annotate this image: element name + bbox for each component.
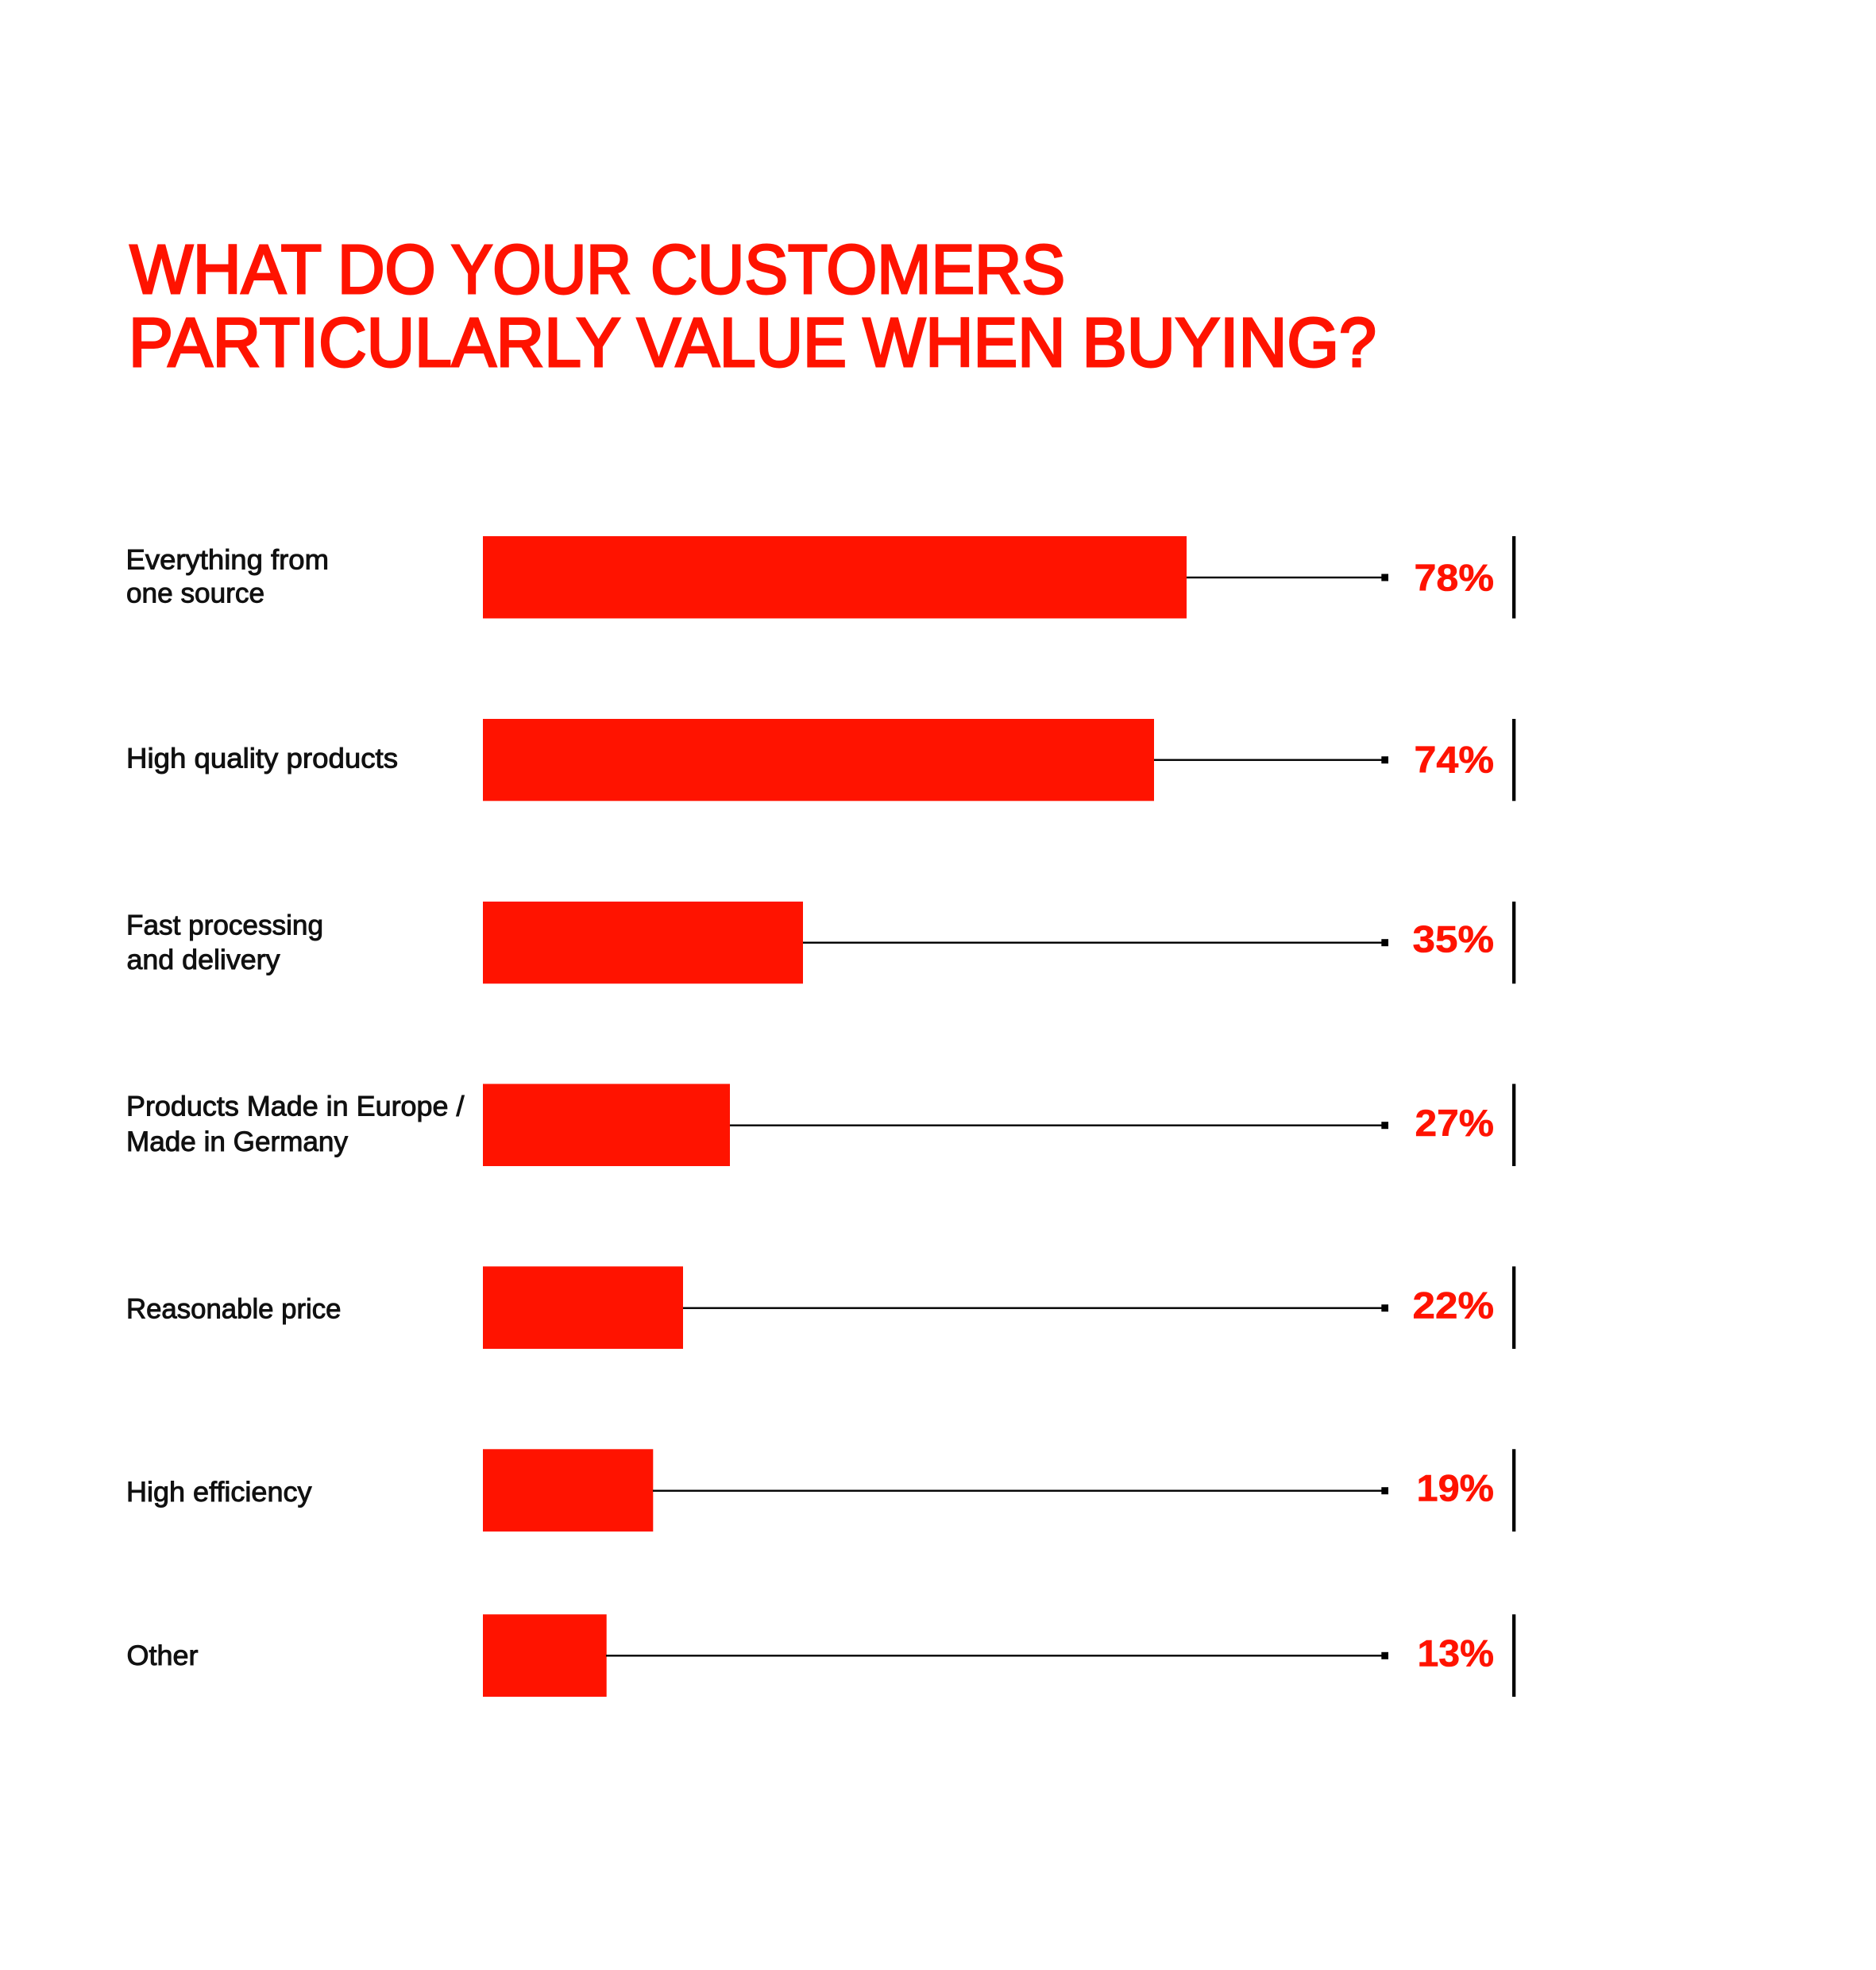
label (126, 1091, 465, 1157)
value: 27% (1415, 1103, 1494, 1145)
title: VALUE (637, 304, 847, 381)
leader line (1154, 756, 1388, 763)
value: 13% (1417, 1632, 1494, 1674)
end rule (1512, 719, 1515, 801)
label: Products Made in Europe / (126, 1091, 465, 1122)
title: WHAT (130, 231, 322, 308)
bar (483, 902, 803, 983)
end rule (1512, 536, 1515, 618)
title: WHEN (863, 304, 1066, 381)
row: products made in Europe / Germany (126, 1084, 1515, 1166)
leader line (730, 1122, 1388, 1129)
bar (483, 1266, 683, 1349)
row: reasonable price (126, 1266, 1515, 1349)
end rule (1512, 1614, 1515, 1697)
title: DO (338, 231, 435, 308)
label: one source (126, 578, 264, 608)
label: Other (127, 1640, 199, 1671)
bar (483, 1084, 730, 1166)
bar (483, 1614, 607, 1697)
label (125, 545, 329, 608)
label: and delivery (127, 944, 280, 975)
row: high efficiency (126, 1449, 1515, 1532)
row: high quality products (126, 719, 1515, 801)
title: PARTICULARLY (129, 304, 621, 381)
row: fast processing and delivery (126, 902, 1515, 983)
title (129, 231, 1376, 381)
row: everything from one source (125, 536, 1515, 618)
label: High quality products (126, 744, 398, 774)
title: YOUR (451, 231, 631, 308)
end rule (1512, 1266, 1515, 1349)
leader line (803, 939, 1388, 946)
label: Reasonable price (126, 1294, 342, 1325)
value: 78% (1414, 558, 1494, 599)
end rule (1512, 902, 1515, 983)
end rule (1512, 1449, 1515, 1532)
label: Everything from (125, 545, 329, 575)
label: Made in Germany (126, 1126, 349, 1157)
value: 74% (1414, 739, 1494, 782)
leader line (683, 1304, 1388, 1311)
bar (483, 536, 1187, 618)
leader line (1187, 574, 1388, 581)
title: CUSTOMERS (650, 231, 1065, 308)
label (126, 910, 323, 975)
leader line (653, 1487, 1388, 1494)
bar (483, 719, 1154, 801)
bar (483, 1449, 653, 1532)
value: 35% (1412, 918, 1494, 961)
label: Fast processing (126, 910, 323, 941)
value: 19% (1417, 1468, 1494, 1509)
title: BUYING? (1082, 304, 1376, 381)
value: 22% (1412, 1284, 1494, 1327)
row: other (127, 1614, 1515, 1697)
end rule (1512, 1084, 1515, 1166)
leader line (606, 1652, 1388, 1659)
label: High efficiency (126, 1477, 312, 1508)
